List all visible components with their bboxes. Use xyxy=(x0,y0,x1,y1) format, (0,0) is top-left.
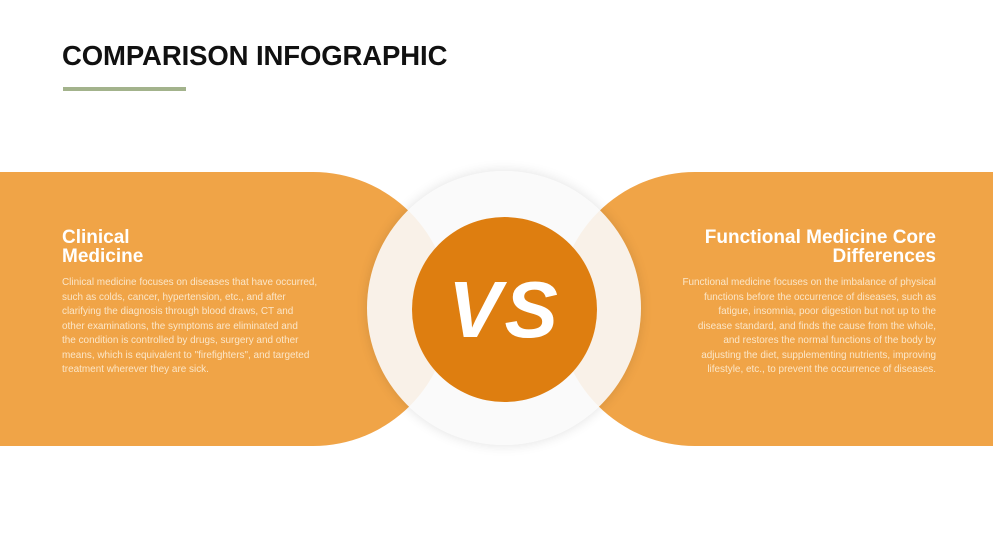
panel: functional medicine xyxy=(558,172,993,446)
right body text: functions before the occurrence of diseases, such as xyxy=(704,292,936,302)
right body text xyxy=(682,277,936,375)
right body text: disease standard, and finds the cause from the whole, xyxy=(698,320,936,332)
title underline xyxy=(63,87,186,91)
right heading xyxy=(705,227,936,267)
right body text: Functional medicine focuses on the imbalance of physical xyxy=(682,277,936,288)
right heading: Functional Medicine Core xyxy=(705,227,936,248)
left body text: such as colds, cancer, hypertension, etc., and after xyxy=(62,292,286,302)
panel: clinical medicine xyxy=(0,172,450,446)
left heading xyxy=(62,227,143,267)
outer circle xyxy=(367,171,641,445)
left body text: clarifying the diagnosis through blood draws, CT and xyxy=(62,306,293,317)
left body text: other examinations, the symptoms are eliminated and xyxy=(62,320,298,332)
vs circle: VS xyxy=(448,265,561,354)
right body text: and restores the normal functions of the body by xyxy=(723,335,936,346)
left body text: Clinical medicine focuses on diseases that have occurred, xyxy=(62,277,317,288)
left heading: Medicine xyxy=(62,246,143,267)
left heading: Clinical xyxy=(62,227,130,248)
left body text: the condition is controlled by drugs, surgery and other xyxy=(62,335,298,346)
right heading: Differences xyxy=(832,246,936,267)
left body text xyxy=(62,277,317,375)
left body text: means, which is equivalent to "firefighters", and targeted xyxy=(62,350,309,360)
right body text: adjusting the diet, supplementing nutrients, improving xyxy=(701,350,936,360)
right body text: fatigue, insomnia, poor digestion but not up to the xyxy=(718,306,936,317)
title: COMPARISON INFOGRAPHIC xyxy=(62,40,447,71)
left body text: treatment wherever they are sick. xyxy=(62,364,209,375)
vs circle xyxy=(412,217,597,402)
right body text: lifestyle, etc., to prevent the occurrence of diseases. xyxy=(707,364,936,375)
